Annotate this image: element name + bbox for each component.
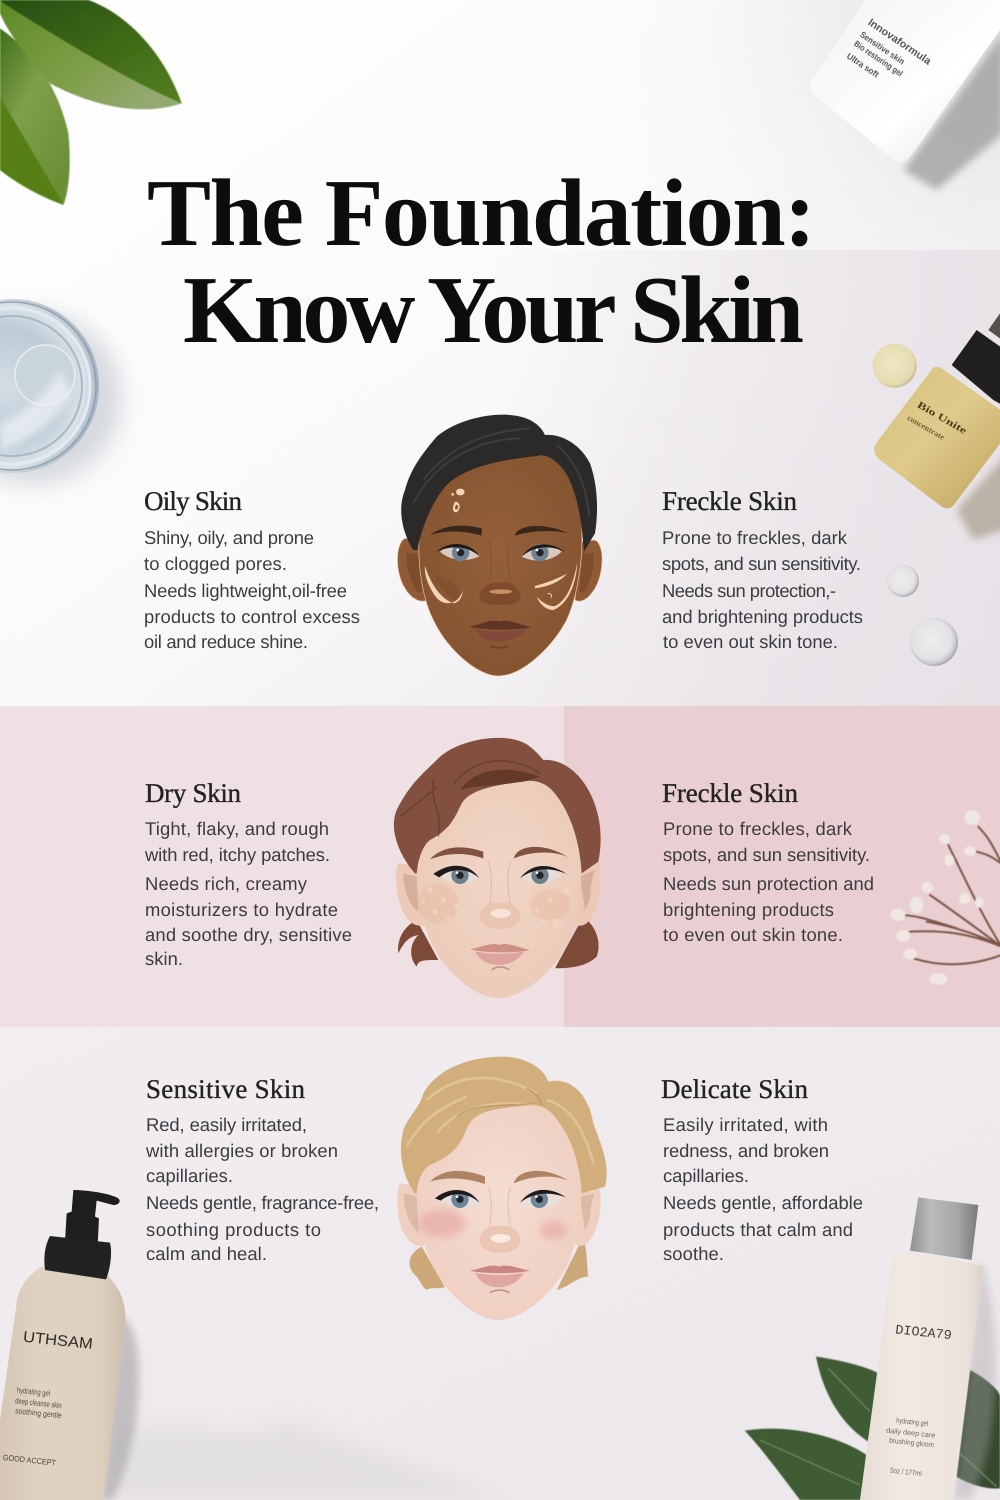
icon: glass of water left xyxy=(0,299,122,484)
text block: delicate skin: Needs gentle, affordable xyxy=(663,1192,863,1213)
bottle label: DIO2A79: 5oz / 177ml xyxy=(890,1466,922,1478)
text block: freckle skin top xyxy=(662,486,863,652)
text block: oily skin: Shiny, oily, and prone xyxy=(144,527,314,548)
icon: ivory toner bottle bottom right xyxy=(860,1197,996,1500)
text block: freckle skin top: to even out skin tone. xyxy=(663,631,838,652)
icon: dried flower branch xyxy=(891,810,1000,985)
text block: dry skin: Dry Skin xyxy=(145,778,242,808)
illustration: oily skin face xyxy=(397,415,602,676)
text block: sensitive skin: calm and heal. xyxy=(146,1243,267,1264)
bottle label text: Ultra soft xyxy=(845,51,881,80)
panel: pink band left xyxy=(0,706,564,1027)
text block: delicate skin: Easily irritated, with xyxy=(663,1114,828,1135)
bottle label text: concentrate xyxy=(906,414,946,442)
text block: sensitive skin xyxy=(145,1074,379,1264)
text block: delicate skin: redness, and broken xyxy=(663,1140,829,1161)
bottle label text: Sensitive skin xyxy=(858,29,907,67)
bottle label text: Bio restoring gel xyxy=(852,38,905,78)
text block: freckle skin top: Needs sun protection,- xyxy=(662,580,836,601)
bottle label: DIO2A79: hydrating gel xyxy=(896,1416,929,1428)
title xyxy=(147,159,816,363)
text block: dry skin: and soothe dry, sensitive xyxy=(145,924,352,945)
text block: freckle skin top: Freckle Skin xyxy=(662,486,798,516)
text block: dry skin xyxy=(144,778,352,969)
text block: freckle skin middle: Needs sun protection and xyxy=(663,873,874,894)
text block: sensitive skin: capillaries. xyxy=(146,1165,233,1186)
text block: dry skin: Tight, flaky, and rough xyxy=(145,818,329,839)
text block: freckle skin middle: Freckle Skin xyxy=(662,778,798,808)
bottle label: DIO2A79: brushing gloom xyxy=(889,1436,934,1449)
panel: pink band right xyxy=(564,706,1000,1027)
text block: dry skin: skin. xyxy=(145,948,183,969)
text block: oily skin: oil and reduce shine. xyxy=(144,631,308,652)
text block: sensitive skin: Sensitive Skin xyxy=(146,1074,306,1104)
bottle label: DIO2A79: DIO2A79 xyxy=(895,1323,952,1344)
text block: sensitive skin: soothing products to xyxy=(146,1219,321,1240)
text block: delicate skin xyxy=(661,1074,863,1264)
icon: green leaves top left xyxy=(0,0,182,205)
illustration: sensitive skin face xyxy=(397,1057,607,1320)
title: The Foundation: xyxy=(147,159,816,266)
icon: water droplets xyxy=(887,565,958,666)
text block: freckle skin middle: to even out skin tone. xyxy=(663,924,843,945)
bottle label: DIO2A79: daily deep care xyxy=(886,1426,936,1439)
concealer marks xyxy=(425,489,577,610)
text block: freckle skin top: and brightening products xyxy=(662,606,863,627)
text block: freckle skin middle: brightening products xyxy=(663,899,834,920)
text block: dry skin: moisturizers to hydrate xyxy=(145,899,338,920)
text block: oily skin: Oily Skin xyxy=(144,486,242,516)
text block: delicate skin: capillaries. xyxy=(663,1165,749,1186)
text block: freckle skin middle: Prone to freckles, dark xyxy=(663,818,853,839)
icon: cream pump bottle bottom left xyxy=(0,1190,139,1500)
text block: freckle skin top: Prone to freckles, dark xyxy=(662,527,848,548)
icon: white product bottle top right xyxy=(810,0,1000,190)
bottle label: UTHSAM: UTHSAM xyxy=(22,1328,94,1352)
bottle label: UTHSAM xyxy=(2,1328,94,1468)
bottle label: UTHSAM: GOOD ACCEPT xyxy=(2,1453,57,1468)
illustration: dry skin face xyxy=(394,738,601,998)
text block: oily skin xyxy=(144,486,360,652)
title: Know Your Skin xyxy=(183,256,804,363)
redness xyxy=(418,1209,567,1239)
bottle label: UTHSAM: hydrating gel xyxy=(16,1386,51,1398)
bottle label text xyxy=(845,16,934,80)
bottle label: UTHSAM: deep cleanse skin xyxy=(15,1396,62,1410)
icon: amber serum dropper bottle and oil droplet xyxy=(873,313,1000,540)
bottle label text: Bio Unite xyxy=(915,399,969,436)
text block: dry skin: with red, itchy patches. xyxy=(144,844,330,865)
text block: sensitive skin: Red, easily irritated, xyxy=(146,1114,307,1135)
text block: delicate skin: products that calm and xyxy=(663,1219,853,1240)
text block: freckle skin top: spots, and sun sensitivity. xyxy=(662,553,861,574)
bottle label: UTHSAM: soothing gentle xyxy=(15,1406,62,1420)
text block: sensitive skin: with allergies or broken xyxy=(145,1140,338,1161)
text block: dry skin: Needs rich, creamy xyxy=(145,873,308,894)
text block: oily skin: to clogged pores. xyxy=(144,553,287,574)
icon: leaves behind right bottle xyxy=(745,1357,1000,1500)
freckles xyxy=(418,883,570,923)
text block: freckle skin middle xyxy=(662,778,874,945)
text block: oily skin: products to control excess xyxy=(144,606,360,627)
bottle label text xyxy=(906,399,969,442)
text block: oily skin: Needs lightweight,oil-free xyxy=(144,580,347,601)
text block: delicate skin: Delicate Skin xyxy=(661,1074,808,1104)
text block: delicate skin: soothe. xyxy=(663,1243,724,1264)
text block: freckle skin middle: spots, and sun sensitivity. xyxy=(663,844,870,865)
bottle label: DIO2A79 xyxy=(886,1323,952,1478)
bottle label text: Innovaformula xyxy=(866,16,934,67)
text block: sensitive skin: Needs gentle, fragrance-free, xyxy=(146,1192,379,1213)
